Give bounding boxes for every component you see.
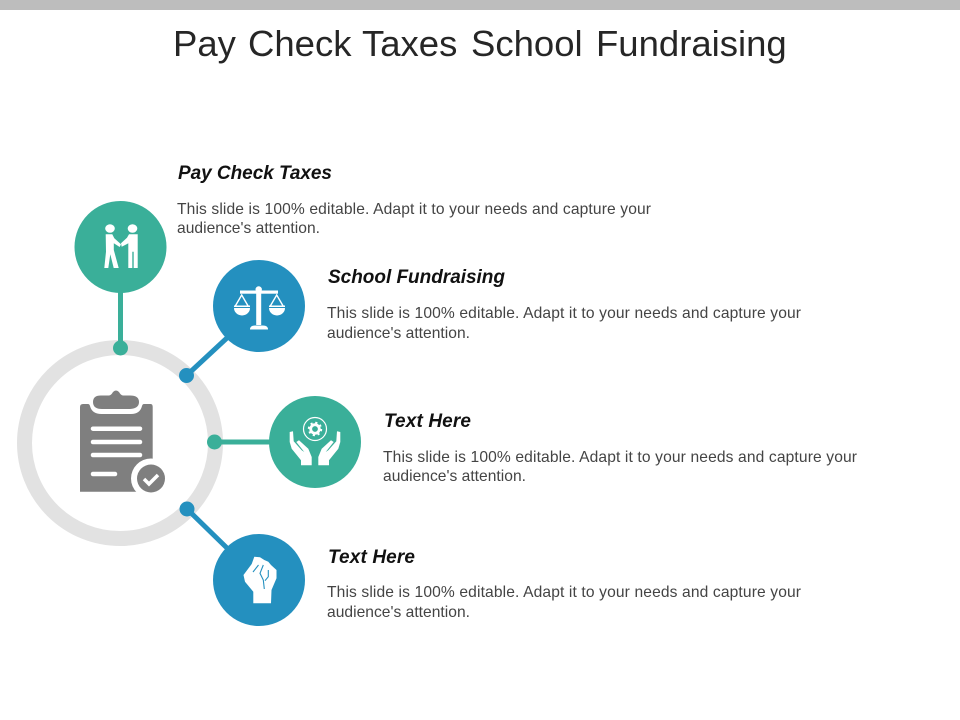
title: Taxes xyxy=(362,23,457,64)
node 4: fist xyxy=(180,502,305,626)
title: Pay xyxy=(173,23,237,64)
text block: Text Here (third): audience's attention. xyxy=(383,468,526,485)
text block: Pay Check Taxes xyxy=(177,163,651,237)
node 1: handshake xyxy=(74,201,166,356)
text block: Pay Check Taxes: This slide is 100% editable. Adapt it to your needs and capture your xyxy=(177,201,651,218)
text block: Text Here (fourth): audience's attention. xyxy=(327,604,470,621)
text block: Pay Check Taxes: Pay Check Taxes xyxy=(178,163,332,184)
icon: balance scale xyxy=(234,286,285,330)
icon: handshake xyxy=(104,224,138,268)
title: School xyxy=(471,23,583,64)
node 2: scales xyxy=(179,260,305,383)
text block: Text Here (fourth): Text Here xyxy=(328,547,415,568)
text block: Text Here (third): This slide is 100% editable. Adapt it to your needs and capture your xyxy=(383,449,857,466)
text block: Text Here (fourth): This slide is 100% editable. Adapt it to your needs and capture your xyxy=(327,584,801,601)
icon: raised fist xyxy=(244,557,276,603)
text block: School Fundraising xyxy=(327,267,801,342)
top bar xyxy=(0,0,960,10)
text block: School Fundraising: School Fundraising xyxy=(328,267,505,288)
node 3: hands with gear xyxy=(207,396,361,488)
title: Check xyxy=(248,23,352,64)
icon: hands holding gear xyxy=(290,418,340,465)
central ring with clipboard xyxy=(24,348,216,538)
text block: Text Here (third) xyxy=(383,411,857,485)
text block: Pay Check Taxes: audience's attention. xyxy=(177,220,320,237)
text block: Text Here (third): Text Here xyxy=(384,411,471,432)
text block: Text Here (fourth) xyxy=(327,547,801,621)
title: Fundraising xyxy=(596,23,787,64)
icon: clipboard with check xyxy=(80,390,171,498)
text block: School Fundraising: This slide is 100% editable. Adapt it to your needs and capture your xyxy=(327,305,801,322)
text block: School Fundraising: audience's attention. xyxy=(327,325,470,342)
